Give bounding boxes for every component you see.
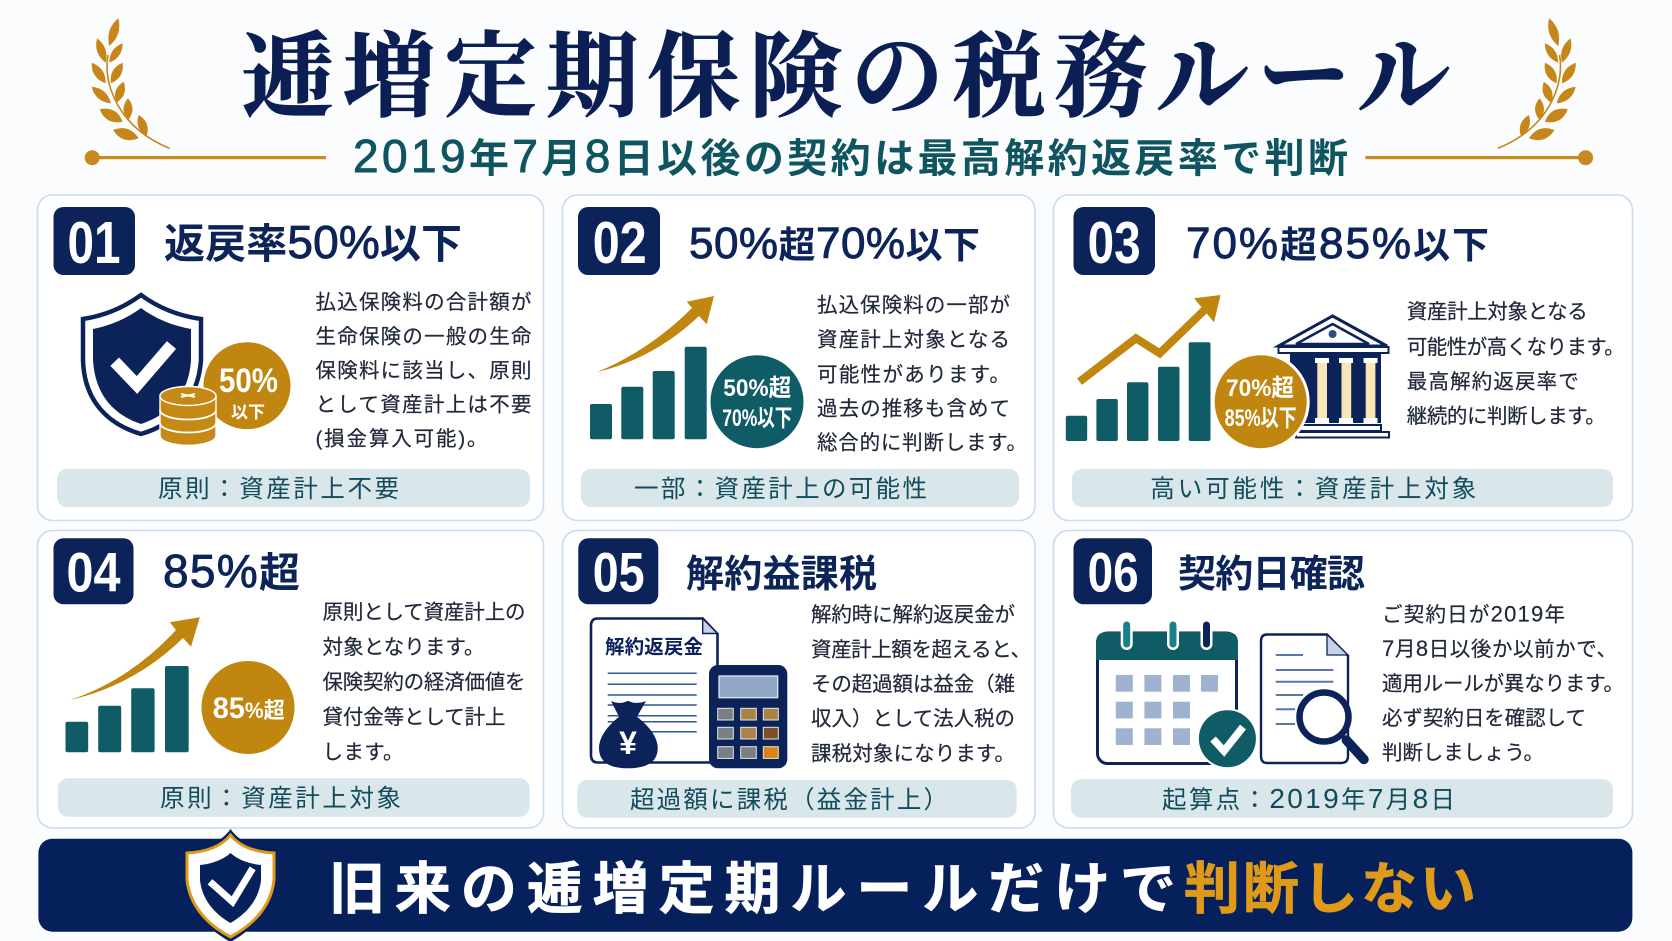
icon: shield with coins and 50% badge — [83, 295, 290, 447]
heading 05: 解約益課税 — [686, 554, 877, 596]
body text 06: 必ず契約日を確認して — [1382, 707, 1586, 730]
body text 05: 収入）として法人税の — [811, 708, 1015, 730]
body text 02: 過去の推移も含めて — [817, 397, 1010, 420]
body text 03 — [1407, 300, 1625, 428]
summary pill 02 — [581, 469, 1019, 507]
badge 06: 06 — [1088, 541, 1139, 604]
banner message: gold emphasis: 判断しない — [1184, 858, 1476, 920]
body text 05: 解約時に解約返戻金が — [811, 604, 1015, 626]
panel: 05 surrender gain taxation — [562, 530, 1035, 828]
summary pill 03 — [1072, 469, 1613, 507]
panel: 06 contract date check — [1054, 530, 1632, 828]
summary pill 04: 原則：資産計上対象 — [160, 784, 401, 812]
body text 06: 適用ルールが異なります。 — [1382, 672, 1624, 696]
summary pill 01: 原則：資産計上不要 — [158, 475, 399, 503]
summary pill 03: 高い可能性：資産計上対象 — [1150, 475, 1476, 503]
heading 03: 70%超85%以下 — [1186, 219, 1489, 268]
heading 04: 85%超 — [163, 545, 300, 597]
banner message: white part: 旧来の逓増定期ルールだけで — [329, 858, 1176, 920]
body text 06: ご契約日が2019年 — [1382, 602, 1565, 626]
bar chart, zigzag arrow, bank and badge: 70%超 — [1226, 375, 1294, 402]
body text 01: 生命保険の一般の生命 — [316, 326, 532, 348]
summary pill 05 — [577, 780, 1017, 818]
panel: 03 over 70% up to 85% — [1054, 195, 1632, 520]
summary pill 06: 起算点：2019年7月8日 — [1162, 783, 1455, 814]
body text 02: 資産計上対象となる — [817, 328, 1010, 351]
icon: document, money bag and calculator: 解約返戻金 — [605, 636, 703, 658]
badge 01: 01 — [68, 210, 120, 276]
body text 03: 可能性が高くなります。 — [1407, 336, 1625, 359]
body text 02: 可能性があります。 — [817, 363, 1010, 386]
heading 02: 50%超70%以下 — [689, 219, 980, 268]
summary pill 06 — [1071, 779, 1613, 818]
body text 03: 最高解約返戻率で — [1407, 371, 1579, 394]
badge 04: 04 — [66, 541, 120, 604]
badge 05: 05 — [593, 541, 645, 604]
title: 逓増定期保険の税務ルール — [241, 27, 1450, 130]
summary pill 01 — [57, 469, 530, 507]
badge 02: 02 — [593, 210, 647, 276]
icon: banner shield — [184, 829, 277, 941]
bar chart with rising arrow and badge: 85%超 — [213, 692, 285, 725]
bar chart with rising arrow and badge: 70%以下 — [722, 405, 792, 432]
body text 01: として資産計上は不要 — [316, 394, 532, 416]
icon: shield with coins and 50% badge: 以下 — [231, 403, 265, 422]
bar chart, zigzag arrow, bank and badge: 85%以下 — [1225, 405, 1297, 432]
body text 04: 対象となります。 — [322, 636, 484, 659]
body text 02: 払込保険料の一部が — [817, 294, 1010, 317]
body text 01 — [316, 291, 532, 450]
body text 04: 保険契約の経済価値を — [322, 671, 526, 694]
body text 04: します。 — [322, 741, 404, 764]
body text 05 — [811, 604, 1031, 766]
body text 06: 判断しましょう。 — [1382, 742, 1544, 764]
panel: 04 over 85% — [38, 530, 544, 828]
body text 06 — [1382, 602, 1624, 764]
panel: 01 return rate 50% or less — [38, 195, 544, 520]
summary pill 05: 超過額に課税（益金計上） — [630, 786, 948, 814]
icon: right laurel — [1498, 18, 1576, 148]
body text 01: 保険料に該当し、原則 — [316, 360, 532, 382]
body text 02: 総合的に判断します。 — [817, 431, 1027, 454]
body text 01: (損金算入可能)。 — [316, 428, 488, 450]
bar chart with rising arrow and badge — [66, 617, 294, 754]
body text 01: 払込保険料の合計額が — [316, 291, 532, 314]
bar chart, zigzag arrow, bank and badge — [1066, 295, 1389, 450]
body text 04: 原則として資産計上の — [322, 601, 526, 624]
icon: document, money bag and calculator: ¥ — [619, 725, 637, 761]
bar chart with rising arrow and badge — [590, 296, 804, 448]
body text 05: その超過額は益金（雑 — [811, 673, 1015, 696]
body text 04 — [322, 601, 526, 764]
icon: calendar and document with magnifier — [1096, 625, 1364, 768]
icon: left laurel — [92, 18, 170, 148]
icon: shield with coins and 50% badge: 50% — [219, 362, 278, 400]
summary pill 02: 一部：資産計上の可能性 — [634, 475, 927, 503]
bar chart with rising arrow and badge: 50%超 — [723, 375, 791, 402]
body text 04: 貸付金等として計上 — [322, 706, 506, 729]
heading 01: 返戻率50%以下 — [164, 216, 462, 268]
icon: document, money bag and calculator — [591, 618, 787, 768]
body text 02 — [817, 294, 1027, 454]
badge 03: 03 — [1088, 210, 1141, 276]
header — [85, 18, 1593, 182]
body text 03: 資産計上対象となる — [1407, 300, 1588, 324]
summary pill 04 — [58, 778, 530, 817]
heading 06: 契約日確認 — [1178, 554, 1365, 596]
banner: closing message — [38, 829, 1632, 941]
body text 03: 継続的に判断します。 — [1407, 405, 1606, 428]
body text 05: 課税対象になります。 — [811, 742, 1015, 766]
panel: 02 over 50% up to 70% — [562, 195, 1035, 520]
subtitle: 2019年7月8日以後の契約は最高解約返戻率で判断 — [353, 130, 1348, 182]
body text 05: 資産計上額を超えると、 — [811, 638, 1031, 662]
body text 06: 7月8日以後か以前かで、 — [1382, 636, 1617, 661]
